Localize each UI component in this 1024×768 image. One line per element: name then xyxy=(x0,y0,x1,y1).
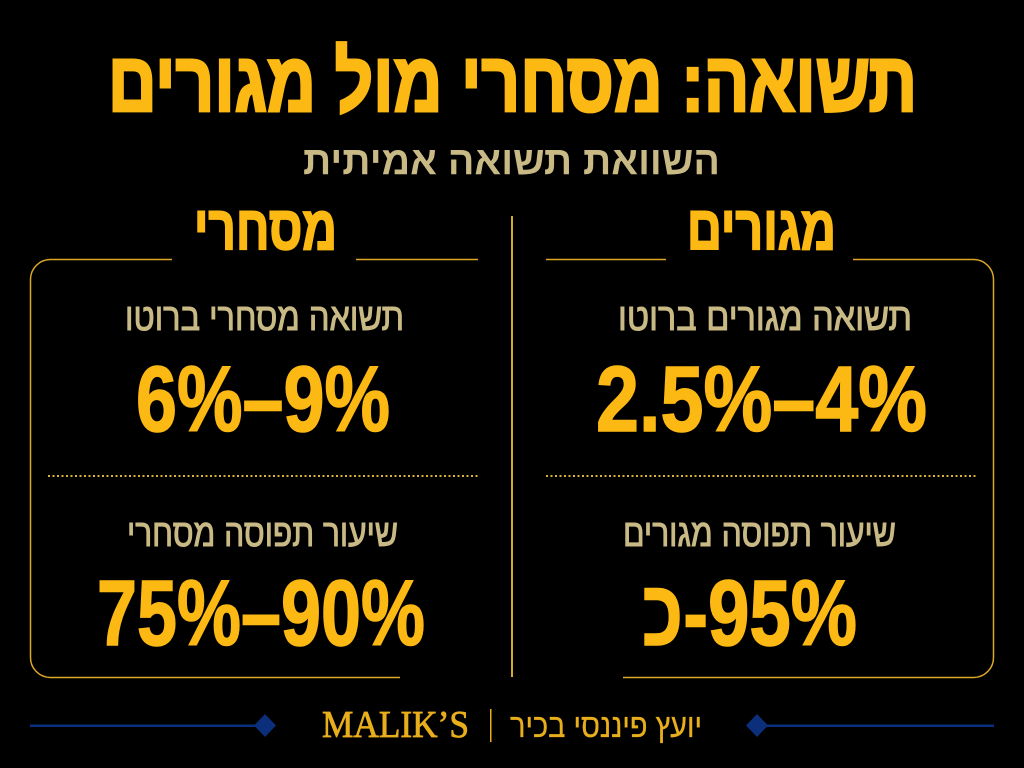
panel frame: commercial xyxy=(30,260,478,678)
value: residential occupancy: כ-95% xyxy=(642,561,857,665)
footer line right xyxy=(762,724,994,727)
footer line left xyxy=(30,724,262,727)
heading: residential: מגורים xyxy=(687,194,836,263)
brand name: MALIK’S xyxy=(322,704,469,746)
dotted divider: commercial xyxy=(48,475,478,477)
tagline: יועץ פיננסי בכיר xyxy=(510,707,702,744)
footer separator xyxy=(490,709,492,742)
icon: diamond left xyxy=(254,714,276,737)
label: residential occupancy: שיעור תפוסה מגורים xyxy=(623,513,896,555)
panel: commercial xyxy=(30,194,478,678)
value: residential gross yield: 2.5%–4% xyxy=(596,347,927,451)
label: commercial occupancy: שיעור תפוסה מסחרי xyxy=(127,513,398,555)
label: commercial gross yield: תשואה מסחרי ברוטו xyxy=(125,297,404,339)
value: commercial occupancy: 75%–90% xyxy=(97,561,425,665)
heading: commercial: מסחרי xyxy=(194,194,337,263)
panel: residential xyxy=(546,194,994,678)
value: commercial gross yield: 6%–9% xyxy=(136,347,390,451)
label: residential gross yield: תשואה מגורים ברוטו xyxy=(618,297,912,339)
subtitle: השוואת תשואה אמיתית xyxy=(303,139,720,183)
footer xyxy=(30,704,994,746)
dotted divider: residential xyxy=(546,475,976,477)
center divider xyxy=(511,216,513,677)
panel frame: residential xyxy=(546,260,994,678)
icon: diamond right xyxy=(746,714,768,737)
